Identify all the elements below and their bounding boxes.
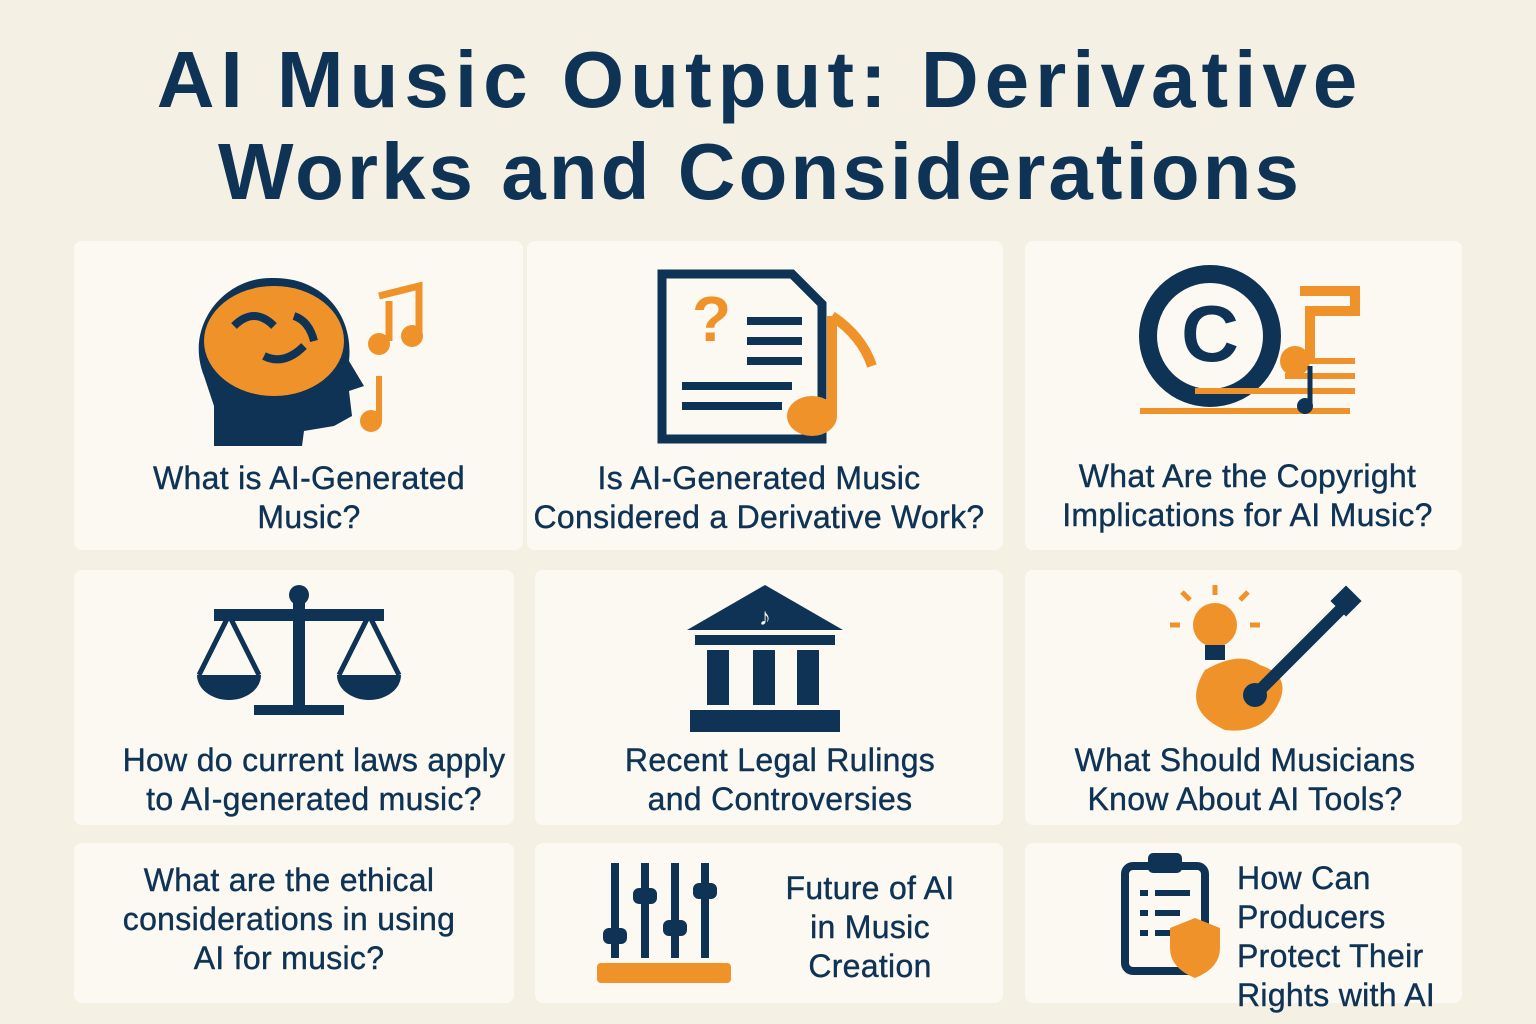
text: considerations in using [123, 901, 455, 937]
text: Creation [808, 948, 932, 984]
icon: scales [196, 585, 402, 715]
panel: musicians [1025, 570, 1462, 825]
panel: future [535, 843, 1003, 1003]
text [1062, 458, 1433, 533]
text: What is AI-Generated [153, 460, 465, 496]
icon: copyright symbol with note [1139, 265, 1360, 414]
text [1074, 742, 1415, 817]
text [123, 742, 506, 817]
panel: legal rulings [535, 570, 1003, 825]
panel: derivative work [527, 241, 1003, 550]
icon: brain head with notes [198, 278, 423, 446]
icon: document question note [658, 270, 877, 444]
text: AI for music? [194, 940, 384, 976]
text: Implications for AI Music? [1062, 497, 1433, 533]
icon: copyright symbol with note: C [1181, 289, 1239, 378]
text [152, 460, 465, 535]
text: to AI-generated music? [146, 781, 482, 817]
text: and Controversies [648, 781, 912, 817]
icon: courthouse: ♪ [759, 604, 771, 631]
text: Rights with AI [1237, 977, 1435, 1013]
text: Music? [257, 499, 361, 535]
text: Considered a Derivative Work? [534, 499, 984, 535]
text: How Can [1237, 860, 1371, 896]
text [123, 862, 455, 976]
text: Is AI-Generated Music [598, 460, 920, 496]
panel: producers [1025, 843, 1462, 1003]
text: What are the ethical [144, 862, 434, 898]
title: Works and Considerations [218, 127, 1302, 216]
text [625, 742, 935, 817]
text: in Music [810, 909, 930, 945]
text [785, 870, 955, 984]
panel: copyright [1025, 241, 1462, 550]
panel: what is AI music [74, 241, 523, 550]
panel: laws [74, 570, 514, 825]
icon: mixer sliders [597, 863, 731, 983]
panel: ethics [74, 843, 514, 1003]
icon: courthouse [687, 585, 843, 732]
text: Recent Legal Rulings [625, 742, 935, 778]
text [534, 460, 984, 535]
icon: bulb and guitar [1170, 585, 1362, 731]
icon: clipboard shield [1121, 853, 1220, 978]
title: AI Music Output: Derivative [157, 35, 1363, 124]
text: What Should Musicians [1075, 742, 1415, 778]
text: What Are the Copyright [1079, 458, 1416, 494]
text: Know About AI Tools? [1088, 781, 1402, 817]
title [157, 35, 1363, 216]
text: Producers [1237, 899, 1386, 935]
text: How do current laws apply [123, 742, 505, 778]
text: Future of AI [785, 870, 955, 906]
text: Protect Their [1237, 938, 1424, 974]
text [1237, 860, 1435, 1013]
icon: document question note: ? [692, 283, 731, 355]
